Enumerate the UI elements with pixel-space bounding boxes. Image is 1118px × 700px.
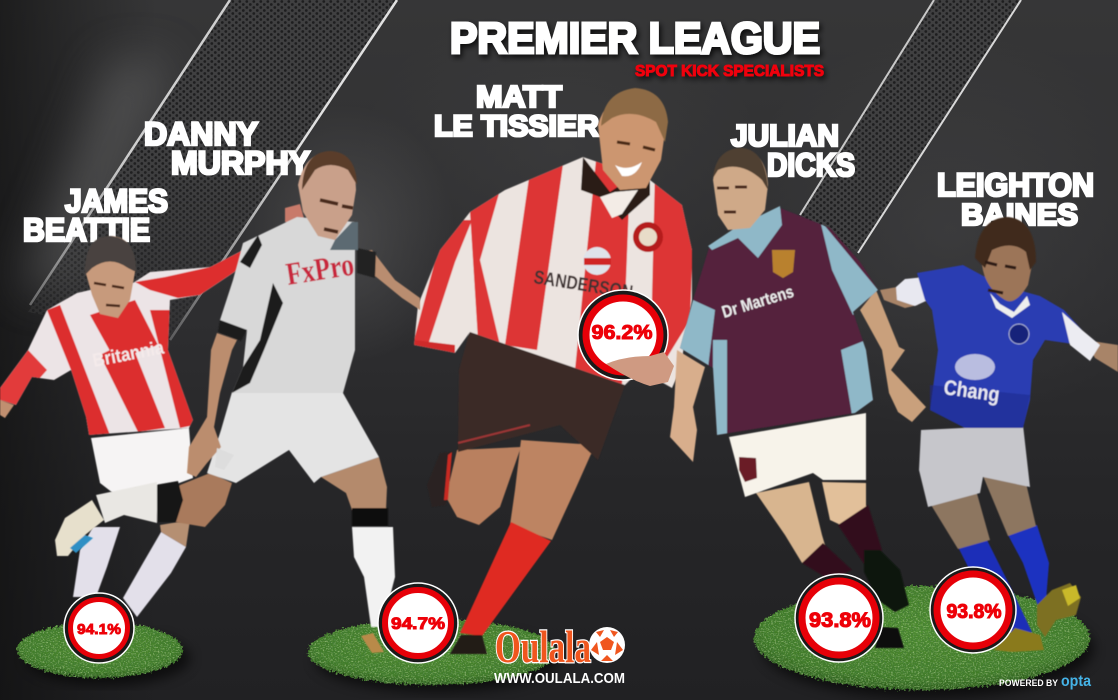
player names — [23, 79, 1094, 248]
name: James Beattie: JAMES — [65, 183, 168, 219]
player: James Beattie — [0, 236, 250, 617]
name: Matt Le Tissier: MATT — [476, 79, 562, 114]
name: Matt Le Tissier — [434, 79, 599, 143]
name: Matt Le Tissier: LE TISSIER — [434, 110, 599, 143]
powered by opta — [999, 673, 1091, 690]
diagonal mesh band left — [28, 0, 397, 340]
name: Julian Dicks — [731, 118, 855, 183]
head: Baines — [978, 218, 1034, 301]
badge: Baines 93.8% — [930, 567, 1016, 653]
sponsor: Chang: Chang — [942, 376, 1001, 407]
diagonal mesh band right — [800, 0, 1021, 253]
player: Leighton Baines — [880, 217, 1118, 652]
name: Leighton Baines — [937, 167, 1094, 232]
grass pitch left — [17, 622, 190, 685]
powered by opta: opta — [1061, 673, 1091, 690]
hand: Le Tissier holding ball — [606, 352, 674, 386]
badge: Dicks 93.8%: 93.8% — [809, 609, 871, 632]
badge: Beattie 94.1% — [64, 593, 134, 663]
subtitle: SPOT KICK SPECIALISTS — [635, 63, 824, 80]
player: Matt Le Tissier — [400, 88, 700, 654]
name: Leighton Baines: BAINES — [961, 197, 1078, 232]
logo: Oulala: Oulala — [495, 621, 591, 672]
head: Beattie — [85, 236, 135, 318]
name: Danny Murphy: MURPHY — [171, 145, 310, 181]
sponsor: Britannia: Britannia — [91, 337, 166, 372]
name: Danny Murphy — [144, 116, 310, 181]
head: Dicks — [713, 149, 768, 230]
player: Julian Dicks — [670, 148, 926, 648]
badge: Dicks 93.8% — [795, 574, 883, 662]
player: Danny Murphy — [55, 151, 420, 653]
grass pitch right — [754, 586, 1094, 698]
sponsor: Dr Martens: Dr Martens — [720, 282, 796, 322]
name: Leighton Baines: LEIGHTON — [937, 167, 1094, 203]
grass pitch centre — [308, 619, 559, 692]
icon: football — [589, 627, 625, 663]
sponsor: FxPro: FxPro — [283, 246, 356, 292]
name: James Beattie: BEATTIE — [23, 212, 150, 248]
name: Danny Murphy: DANNY — [144, 116, 258, 152]
powered by opta: POWERED BY — [999, 678, 1059, 689]
badge: Le Tissier 96.2% — [578, 290, 668, 380]
badge: Le Tissier 96.2%: 96.2% — [592, 322, 653, 344]
badge: Murphy 94.7%: 94.7% — [391, 614, 445, 633]
head: Le Tissier — [598, 92, 666, 190]
badge: Murphy 94.7% — [378, 583, 458, 663]
badge: Beattie 94.1%: 94.1% — [77, 621, 121, 638]
website url: WWW.OULALA.COM — [494, 670, 625, 687]
head: Murphy — [298, 152, 356, 240]
title: PREMIER LEAGUE — [450, 14, 820, 63]
sponsor: Sanderson: SANDERSON — [532, 267, 634, 304]
name: Julian Dicks: JULIAN — [731, 118, 839, 153]
name: James Beattie — [23, 183, 168, 248]
collar: Le Tissier — [581, 157, 650, 220]
badge: Baines 93.8%: 93.8% — [946, 601, 1002, 623]
name: Julian Dicks: DICKS — [767, 147, 855, 183]
